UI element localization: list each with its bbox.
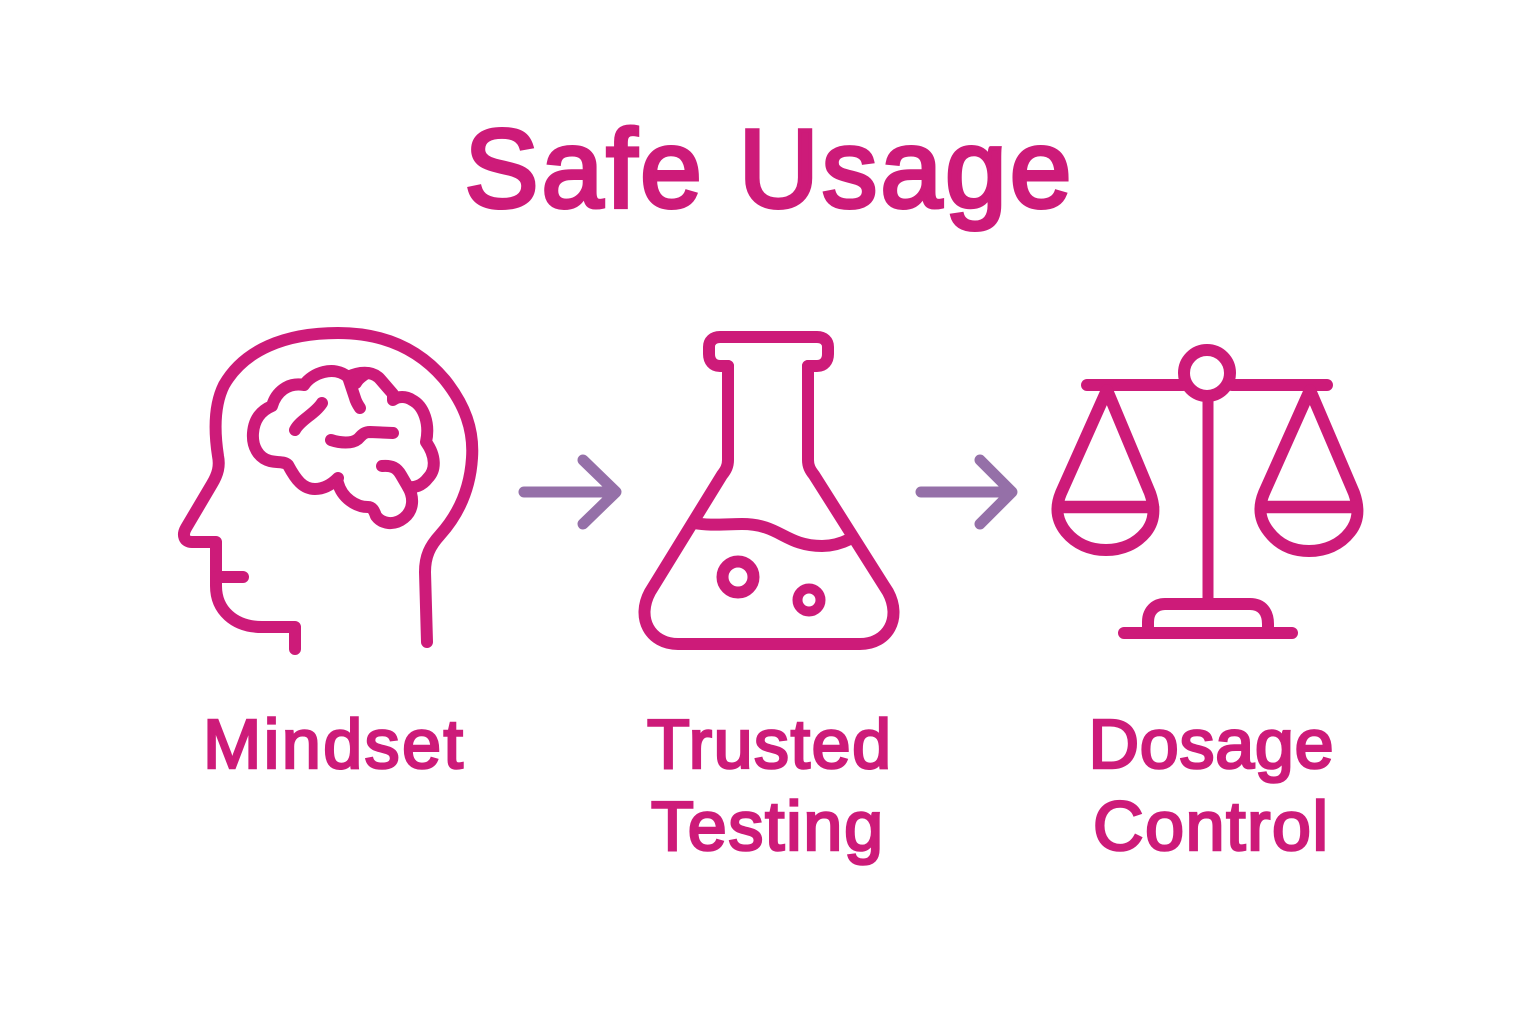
arrow: testing to dosage: [921, 460, 1012, 524]
flask liquid: [694, 523, 850, 546]
label: dosage control: [1088, 705, 1334, 865]
flask bubbles: [722, 562, 754, 592]
label: dosage control: Control: [1093, 787, 1328, 865]
label: trusted testing: [647, 705, 891, 865]
arrow: mindset to testing: [524, 460, 616, 524]
label: mindset: Mindset: [203, 705, 463, 783]
icon: balance scale: [1057, 350, 1357, 633]
label: dosage control: Dosage: [1088, 705, 1334, 783]
icon: head with brain: [184, 333, 472, 649]
title: Safe Usage: [464, 107, 1072, 231]
label: trusted testing: Trusted: [647, 705, 891, 783]
icon: flask: [645, 337, 893, 644]
label: trusted testing: Testing: [651, 787, 883, 865]
icon: brain outline: [253, 371, 434, 523]
